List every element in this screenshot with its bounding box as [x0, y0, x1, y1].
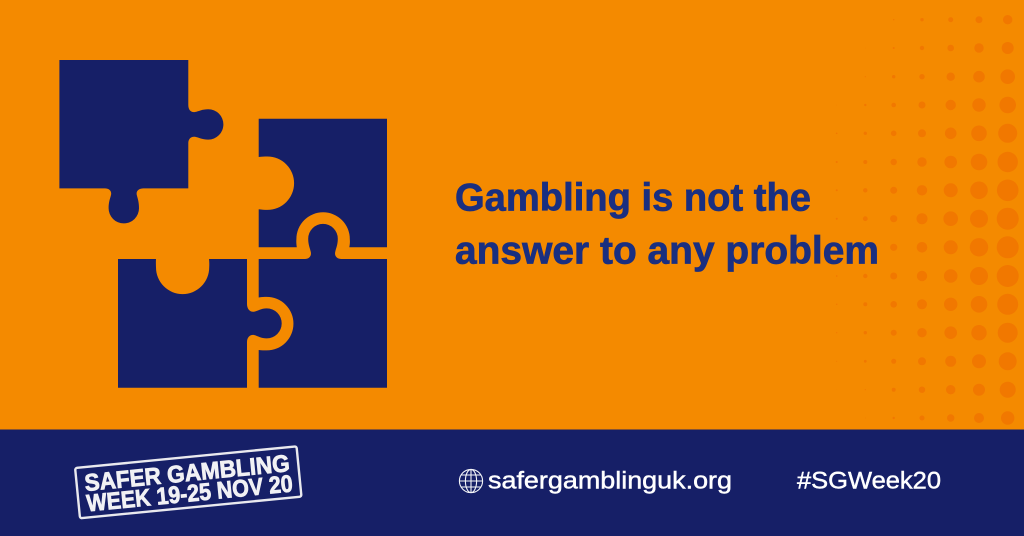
headline: Gambling is not the — [455, 176, 811, 220]
stamp logo: Safer Gambling Week: WEEK 19-25 NOV 20 — [85, 470, 294, 518]
icon: jigsaw puzzle — [59, 60, 387, 388]
website address: safergamblinguk.org — [488, 468, 732, 494]
puzzle piece: bottom left — [118, 259, 282, 388]
puzzle piece: top left — [59, 60, 223, 223]
stamp logo: Safer Gambling Week — [75, 446, 301, 518]
headline: answer to any problem — [455, 230, 879, 272]
hashtag: #SGWeek20 — [797, 468, 941, 494]
halftone dot pattern — [836, 15, 1019, 425]
headline — [455, 176, 879, 272]
puzzle piece: top right — [259, 119, 387, 247]
icon: globe — [459, 469, 483, 493]
stamp logo: Safer Gambling Week: SAFER GAMBLING — [83, 450, 291, 497]
puzzle piece: bottom right — [259, 224, 387, 388]
footer band — [0, 430, 1024, 536]
